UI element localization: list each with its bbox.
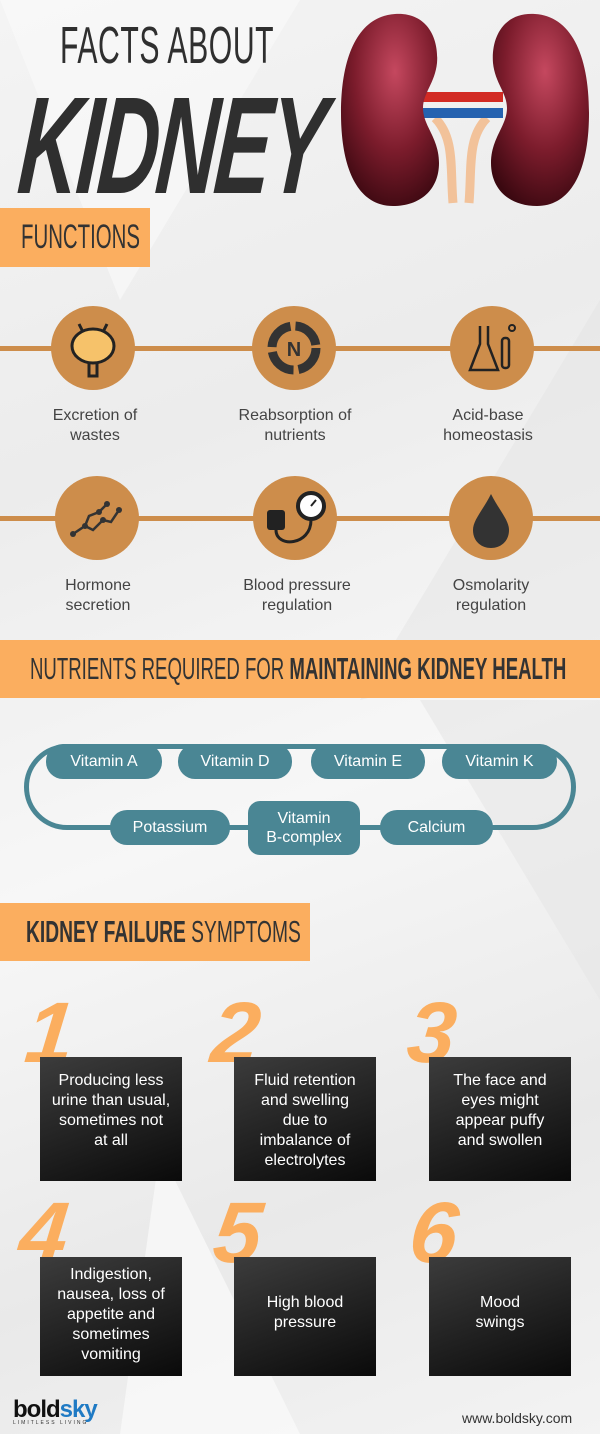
icon: hormone molecule xyxy=(55,476,139,560)
label: excretion xyxy=(53,407,138,444)
symptom numbers: 2 xyxy=(207,985,265,1081)
nutrient pills: Vitamin A xyxy=(70,753,138,770)
nutrient loop xyxy=(24,744,576,830)
symptom numbers: 1 xyxy=(21,985,79,1081)
heading: symptoms xyxy=(0,903,310,961)
symptom box 4: Indigestion, xyxy=(70,1266,152,1283)
label: osmolarity: regulation xyxy=(456,597,526,614)
label: reabsorption: Reabsorption of xyxy=(239,407,351,424)
symptom numbers xyxy=(15,985,463,1281)
label: blood pressure: Blood pressure xyxy=(243,577,351,594)
heading: nutrients: NUTRIENTS REQUIRED FOR MAINTAINING KIDNEY HEALTH xyxy=(30,651,566,686)
symptom box 6 xyxy=(429,1257,571,1376)
symptom numbers: 3 xyxy=(403,985,461,1081)
nutrient pills: Vitamin K xyxy=(465,753,534,770)
symptom box 4: nausea, loss of xyxy=(57,1286,165,1303)
nutrient pills: Vitamin xyxy=(277,810,331,827)
label: hormone: secretion xyxy=(66,597,130,614)
heading: nutrients xyxy=(0,640,600,698)
label: acid-base xyxy=(443,407,533,444)
symptom box 4 xyxy=(40,1257,182,1376)
icon: flask xyxy=(450,306,534,390)
nutrient pills: B-complex xyxy=(266,829,342,846)
nutrient pills: Potassium xyxy=(133,819,207,836)
label: reabsorption: nutrients xyxy=(264,427,326,444)
symptom box 4: sometimes xyxy=(72,1326,150,1343)
kidney illustration xyxy=(340,14,589,206)
icon: nutrients cycle: N xyxy=(287,339,301,361)
icon: nutrients cycle xyxy=(252,306,336,390)
symptom box 2: due to xyxy=(283,1112,327,1129)
symptom box 5 xyxy=(234,1257,376,1376)
label: reabsorption xyxy=(239,407,352,444)
title: kidney: KIDNEY xyxy=(13,69,330,223)
logo: boldsky xyxy=(13,1396,97,1423)
symptom box 5: pressure xyxy=(274,1314,336,1331)
symptom box 1: at all xyxy=(94,1132,128,1149)
label: hormone xyxy=(65,577,131,614)
function lines xyxy=(0,346,600,351)
nutrient pills: Calcium xyxy=(408,819,465,836)
heading: functions xyxy=(0,208,150,267)
nutrient pills: Vitamin D xyxy=(200,753,270,770)
label: osmolarity: Osmolarity xyxy=(453,577,529,594)
label: acid-base: homeostasis xyxy=(443,427,533,444)
website url: www.boldsky.com xyxy=(462,1410,572,1426)
label: osmolarity xyxy=(453,577,530,614)
symptom box 6: swings xyxy=(476,1314,524,1331)
label: acid-base: Acid-base xyxy=(452,407,524,424)
symptom box 3: The face and xyxy=(453,1072,547,1089)
symptom box 5: High blood xyxy=(267,1294,343,1311)
symptom box 2: imbalance of xyxy=(260,1132,350,1149)
symptom numbers: 5 xyxy=(209,1185,267,1281)
symptom box 4: vomiting xyxy=(81,1346,141,1363)
symptom box 1 xyxy=(40,1057,182,1181)
icon: bladder xyxy=(51,306,135,390)
logo: LIMITLESS LIVING xyxy=(13,1420,88,1426)
heading: symptoms: KIDNEY FAILURE SYMPTOMS xyxy=(26,914,301,949)
label: blood pressure xyxy=(243,577,351,614)
label: hormone: Hormone xyxy=(65,577,131,594)
symptom box 3 xyxy=(429,1057,571,1181)
symptom box 2: Fluid retention xyxy=(254,1072,356,1089)
nutrient pills: Vitamin E xyxy=(334,753,402,770)
symptom numbers: 6 xyxy=(405,1185,463,1281)
title: facts about: FACTS ABOUT xyxy=(60,17,274,75)
symptom box 1: sometimes not xyxy=(59,1112,163,1129)
symptom box 3: eyes might xyxy=(461,1092,539,1109)
symptom box 4: appetite and xyxy=(67,1306,155,1323)
symptom box 6: Mood xyxy=(480,1294,520,1311)
symptom box 1: urine than usual, xyxy=(52,1092,170,1109)
symptom numbers: 4 xyxy=(15,1185,73,1281)
label: blood pressure: regulation xyxy=(262,597,332,614)
label: excretion: wastes xyxy=(70,427,120,444)
symptom box 3: appear puffy xyxy=(456,1112,544,1129)
symptom box 3: and swollen xyxy=(458,1132,542,1149)
symptom box 1: Producing less xyxy=(59,1072,163,1089)
icon: drop xyxy=(449,476,533,560)
label: excretion: Excretion of xyxy=(53,407,137,424)
nutrient pills xyxy=(46,744,557,855)
symptom box 2: and swelling xyxy=(261,1092,349,1109)
symptom box 2: electrolytes xyxy=(265,1152,345,1169)
heading: functions: FUNCTIONS xyxy=(21,218,140,256)
icon: blood pressure gauge xyxy=(253,476,337,560)
symptom box 2 xyxy=(234,1057,376,1181)
